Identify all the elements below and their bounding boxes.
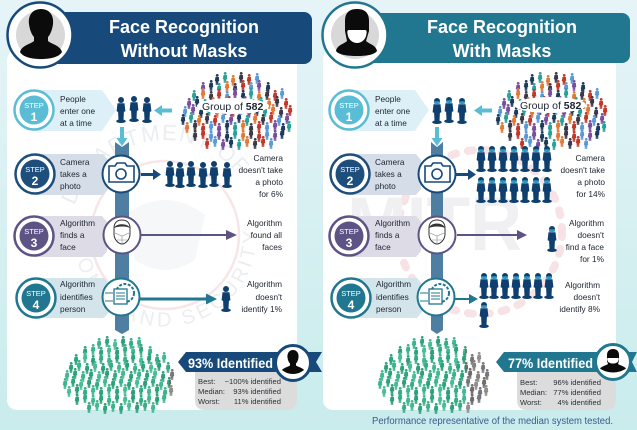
icon: person without mask xyxy=(8,2,72,68)
header bar left xyxy=(50,12,312,64)
camera result text left xyxy=(239,153,284,199)
step 4 left: 4 xyxy=(33,298,40,312)
watermark: MITRE: MITR xyxy=(347,182,522,267)
watermark: MITRE xyxy=(347,150,562,314)
face result text left: found all xyxy=(251,230,282,240)
stats box right: 96% identified xyxy=(553,378,601,387)
step 4 right: STEP xyxy=(341,289,361,298)
step 3 right: face xyxy=(375,242,391,252)
step 3 left xyxy=(14,216,107,257)
people not photographed left xyxy=(165,161,232,188)
watermark: DHS seal: DEPARTMENT OF xyxy=(61,124,250,204)
step 1 right: enter one xyxy=(375,106,410,116)
icon: camera right xyxy=(418,156,456,192)
step 4 right: identifies xyxy=(376,292,409,302)
identify result text right: Algorithm xyxy=(565,280,600,290)
stats box right: 4% identified xyxy=(558,398,601,407)
result banner left xyxy=(178,346,322,380)
step 2 right xyxy=(330,154,421,195)
step 1 right: People xyxy=(375,94,401,104)
panel: face recognition with masks xyxy=(322,2,637,414)
header bar left: Without Masks xyxy=(121,41,247,61)
face result text left: faces xyxy=(262,242,282,252)
camera result text right: Camera xyxy=(575,153,605,163)
person not identified left xyxy=(221,286,231,312)
stats box right: Median: xyxy=(520,388,547,397)
arrow: face result left xyxy=(141,230,237,240)
step 4 right: Algorithm xyxy=(376,279,411,289)
step 2 right: Camera xyxy=(375,157,405,167)
people entering left xyxy=(116,96,152,123)
masked people entering right xyxy=(432,97,467,124)
camera result text right: doesn't take xyxy=(561,165,605,175)
icon: identify gear right xyxy=(418,278,454,316)
footnote: Performance representative of the median system tested. xyxy=(372,416,613,427)
step 3 left: 3 xyxy=(31,236,38,250)
step 1 right: 1 xyxy=(346,110,353,124)
step 4 left: person xyxy=(60,304,86,314)
arrow: crowd to people left xyxy=(154,105,172,116)
step 2 right: takes a xyxy=(375,169,402,179)
camera result text left: Camera xyxy=(253,153,283,163)
face result text left: Algorithm xyxy=(247,218,282,228)
step 4 left: identifies xyxy=(60,292,93,302)
face result text left xyxy=(247,218,282,252)
group of 582 crowd left: Group of 582 xyxy=(202,101,263,113)
stats box left: ~100% identified xyxy=(225,377,281,386)
step 1 left: enter one xyxy=(60,106,95,116)
watermark: DHS seal xyxy=(61,124,256,326)
step 2 left: STEP xyxy=(25,165,45,174)
step 4 right xyxy=(332,278,422,318)
people not identified right xyxy=(479,273,554,328)
face result text right: find a face xyxy=(566,242,604,252)
watermark: DHS seal: HOMELAND SECURITY xyxy=(79,231,256,326)
step 2 right: STEP xyxy=(340,165,360,174)
identify result text right: doesn't xyxy=(574,292,601,302)
face result text right: Algorithm xyxy=(569,218,604,228)
camera result text left: doesn't take xyxy=(239,165,283,175)
arrow: face result right xyxy=(457,230,527,240)
stats box left: Best: xyxy=(198,377,215,386)
camera result text right: a photo xyxy=(577,177,605,187)
step 4 right: 4 xyxy=(348,298,355,312)
step 2 left: Camera xyxy=(60,157,90,167)
step 1 right: STEP xyxy=(339,101,359,110)
step 2 left: 2 xyxy=(32,174,39,188)
face result text right xyxy=(566,218,605,264)
step 1 right xyxy=(330,90,429,131)
step 1 right: at a time xyxy=(375,118,407,128)
header bar left: Face Recognition xyxy=(109,17,259,37)
arrow: identify result right xyxy=(455,294,478,304)
step 2 left xyxy=(16,154,108,195)
camera result text left: for 6% xyxy=(259,189,284,199)
stats box right: 77% identified xyxy=(553,388,601,397)
result banner right: 77% Identified xyxy=(508,355,593,371)
person without found face right xyxy=(547,226,557,252)
step 4 left xyxy=(16,278,109,318)
stats box right xyxy=(517,368,616,410)
stats box right: Worst: xyxy=(520,398,542,407)
step 2 left: takes a xyxy=(60,169,87,179)
identify result text left: Algorithm xyxy=(247,279,282,289)
panel: face recognition without masks xyxy=(6,1,322,414)
step 3 left: Algorithm xyxy=(60,218,95,228)
step 1 left: 1 xyxy=(31,110,38,124)
step 3 right: 3 xyxy=(346,236,353,250)
icon: face scan right xyxy=(418,216,456,254)
icon: identify gear left xyxy=(102,278,140,316)
step 4 left: STEP xyxy=(26,289,46,298)
step 2 right: 2 xyxy=(347,174,354,188)
icon: person with mask xyxy=(322,2,388,68)
panel background right xyxy=(323,50,616,410)
step 2 left: photo xyxy=(60,181,81,191)
step 4 right: person xyxy=(376,304,402,314)
process spine left xyxy=(115,142,129,334)
step 3 right: Algorithm xyxy=(375,218,410,228)
arrow: identify result left xyxy=(140,294,217,304)
icon: face scan left xyxy=(104,216,140,254)
step 1 left: People xyxy=(60,94,86,104)
camera result text left: a photo xyxy=(255,177,283,187)
face result text right: for 1% xyxy=(580,254,605,264)
icon: camera left xyxy=(102,156,140,192)
step 1 left: STEP xyxy=(24,101,44,110)
result banner left: 93% Identified xyxy=(188,355,273,371)
group of 582 crowd left xyxy=(181,72,292,150)
header bar right xyxy=(365,13,630,63)
identify result text left: doesn't xyxy=(256,292,283,302)
arrow: camera to missed right xyxy=(456,169,476,180)
step 3 left: finds a xyxy=(60,230,85,240)
arrow: camera to missed left xyxy=(141,169,161,180)
stats box right: Best: xyxy=(520,378,537,387)
identified crowd right xyxy=(378,336,489,414)
step 3 left: STEP xyxy=(24,227,44,236)
step 3 left: face xyxy=(60,242,76,252)
step 3 right: finds a xyxy=(375,230,400,240)
stats box left: Worst: xyxy=(198,397,220,406)
process spine right xyxy=(431,142,443,334)
group of 582 crowd right: Group of 582 xyxy=(520,100,581,112)
identify result text right: identify 8% xyxy=(559,304,601,314)
header bar right: Face Recognition xyxy=(427,17,577,37)
identify result text right xyxy=(559,280,601,314)
camera result text right xyxy=(561,153,606,199)
header bar right: With Masks xyxy=(453,41,551,61)
step 1 left xyxy=(14,90,116,131)
stats box left: 11% identified xyxy=(234,397,281,406)
step 1 left: at a time xyxy=(60,118,92,128)
identify result text left xyxy=(241,279,283,314)
camera result text right: for 14% xyxy=(576,189,606,199)
identify result text left: identify 1% xyxy=(241,304,283,314)
face result text right: doesn't xyxy=(578,230,605,240)
people not photographed right xyxy=(476,146,552,203)
step 4 left: Algorithm xyxy=(60,279,95,289)
stats box left: Median: xyxy=(198,387,225,396)
arrow: down to step 2 left xyxy=(116,127,128,146)
arrow: down to step 2 right xyxy=(432,127,442,146)
result banner right xyxy=(496,344,637,380)
identified crowd left xyxy=(63,336,174,414)
step 2 right: photo xyxy=(375,181,396,191)
group of 582 crowd right xyxy=(496,72,607,150)
step 3 right: STEP xyxy=(339,227,359,236)
stats box left xyxy=(195,368,297,410)
panel background left xyxy=(7,50,297,410)
stats box left: 93% identified xyxy=(233,387,281,396)
step 3 right xyxy=(330,216,421,257)
arrow: crowd to people right xyxy=(474,105,492,116)
